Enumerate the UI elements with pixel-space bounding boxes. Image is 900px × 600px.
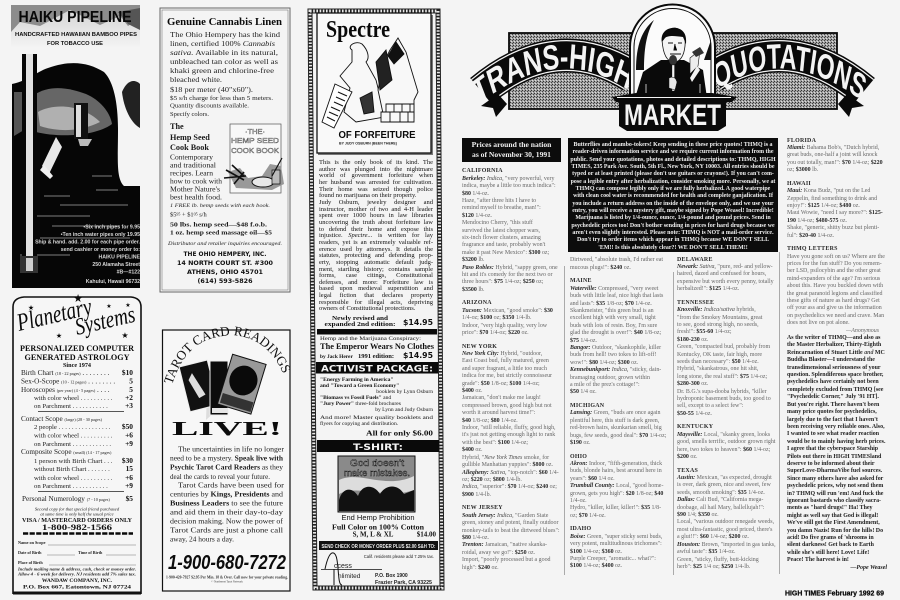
price list: on Parchment . . . . . . . . . . .	[34, 403, 108, 410]
speaker suit	[635, 60, 707, 98]
text block: Spectre book description: spent over 1000 hours in law libraries	[319, 212, 433, 219]
text block: Spectre book description: erence used by attorneys. It details the	[319, 246, 433, 253]
text block: Spectre book description: uncovering the truth about forfeiture law	[319, 219, 433, 226]
column 2: price listings: Boise: Green, "super sticky semi buds, very potent, multitudinous trichomes": $100 1/4-oz; $360 oz. Purple Creeper, "aromatic... what?": $100 1/4-oz; $400 oz.	[570, 534, 662, 569]
column 3: price listings: Maysville: Local, "skanky green, looks good, smells terrific, outdoor grown right here, two tokes to heaven": $60 1/4-oz; $200 oz.	[677, 432, 775, 460]
activist package copy	[320, 377, 434, 438]
linen copy	[170, 30, 280, 118]
text block: Spectre book description	[319, 159, 433, 312]
body copy: away, 24 hours a day.	[170, 536, 234, 544]
ad price and address text: #B—#122	[117, 270, 140, 276]
column 4: prices and letters: Miami: Bahama Bob's, "Dutch hybrid, great buds, one-half a joint will knock you out totally, man!": $70 1/4-oz; $220 oz; $3000 lb.	[787, 145, 883, 173]
activist package copy: "Biomass vs Fossil Fuels" and	[320, 395, 391, 401]
column 4: prices and letters: FLORIDA	[787, 138, 816, 144]
illustration: t-shirt design: make mistakes.	[344, 468, 410, 479]
phone number: 1-900-680-7272	[168, 552, 286, 574]
illustration: t-shirt design: God doesn't	[350, 458, 404, 469]
text block: Spectre book description: statutes, protecting and defending prop-	[319, 252, 433, 259]
activist package copy: and "Toward a Green Economy"	[320, 383, 399, 389]
cook book copy: Contemporary	[170, 154, 213, 162]
text block: Spectre book description: world of government forfeiture when	[319, 172, 433, 179]
order form: Time of Birth	[78, 550, 103, 555]
body copy	[170, 446, 285, 544]
script logo: ★	[106, 303, 112, 310]
column 3: price listings: TENNESSEE	[677, 300, 714, 306]
Access Unlimited logo and address: nlimited	[338, 573, 361, 580]
illustration: Hemp Seed Cook Book: HEMP SEED	[231, 136, 280, 145]
script logo: ★	[121, 331, 129, 340]
cook book copy: 1 oz. hemp seed massage oil—$5	[170, 230, 272, 236]
Access Unlimited logo and address: P.O. Box 1900	[375, 573, 408, 579]
ad heading band: HANDCRAFTED HAWAIIAN BAMBOO PIPES	[15, 32, 137, 38]
column 3: price listings: TEXAS	[677, 468, 698, 474]
cook book copy: best health food.	[170, 194, 222, 202]
script logo	[14, 293, 138, 341]
column 2: price listings: OHIO	[570, 454, 587, 460]
t-shirt bar: T-SHIRT:	[353, 443, 403, 453]
script logo: ★	[56, 332, 62, 340]
script logo: Systems	[73, 302, 138, 341]
activist package copy: And more! Master quality booklets and	[320, 415, 433, 421]
price list: 1 person with Birth Chart . . .	[34, 458, 113, 465]
column 2: price listings: Dirtweed, "absolute trash, I'd rather eat mucous plugs!": $240 oz.	[570, 257, 663, 271]
Access Unlimited logo and address: Frazier Park, CA 93225	[375, 580, 432, 586]
text block: Spectre book description: to defend their home and expose this	[319, 226, 433, 233]
price list: Birth Chart (18 - 22 pages) . . . . . . . .	[21, 369, 110, 377]
linen copy: linen, certified 100% Cannabis	[170, 39, 275, 48]
cook book copy: 05	[194, 212, 198, 216]
column 1: price listings	[462, 168, 560, 571]
column 4: prices and letters: —Anonymous	[846, 328, 879, 334]
company address	[177, 251, 273, 285]
ad: Tarot Card Readings	[162, 326, 291, 592]
prices: +3	[125, 401, 133, 410]
order bar	[319, 541, 438, 550]
linen copy: khaki green and chlorine-free	[170, 66, 275, 75]
price list: without Birth Chart . . . . . . .	[34, 466, 110, 473]
ad heading: Genuine Cannabis Linen	[167, 17, 282, 28]
pedestal and MARKET sign	[612, 93, 737, 132]
price list: Contact Scope (large) (28 - 30 pages)	[21, 415, 102, 423]
column 2: price listings: MAINE	[570, 278, 592, 284]
Emperor book: by Jack Herer	[320, 354, 353, 360]
t-shirt price: Full Color on 100% Cotton	[332, 524, 424, 532]
ad: Genuine Cannabis Linen	[160, 8, 290, 292]
ad price and address text: HAIKU PIPELINE	[98, 254, 141, 260]
illustration: Hemp Seed Cook Book: ·THE·	[245, 127, 265, 136]
prices: $30	[122, 456, 133, 465]
fine print	[166, 576, 288, 584]
prices: +6	[125, 473, 133, 482]
body copy: deal the cards to reveal your future.	[170, 473, 270, 481]
book price: Newly revised and	[332, 316, 389, 322]
illustration: t-shirt design	[338, 456, 415, 522]
activist package copy: flyers for copying and distribution.	[320, 420, 399, 427]
linen copy: Specify colors.	[170, 111, 210, 118]
text block: Spectre book description: ment, startling history; contains sample	[319, 266, 433, 272]
book price	[324, 316, 433, 328]
text block: Spectre book description: forms, case citings, Constitutional	[319, 272, 433, 279]
company address: P.O. Box 667, Eatontown, NJ 07724	[23, 584, 131, 590]
price list: with color wheel . . . . . . . . . .	[34, 475, 113, 482]
ad border	[162, 330, 290, 591]
column 2: price listings: Waterville: Compressed, "very sweet buds with little leaf, nice high that lasts and lasts": $35 1/8-oz; $70 1/4-oz. Skankmeister, "this green bud is an excellent high with very small, tight buds with lots of resin. Boy, I'm sure glad the drought is over!": $40 1/8-oz; $75 1/4-oz. Bangor: Outdoor, "skankophile, killer buds from hell! two tokes to lift-off! wow!": $80 1/4-oz; $300 oz. Kennebunkport: Indica, "sticky, dain- bramaging outdoor, grown within a mile of the prez's cottage!": $50 1/4 oz.	[570, 286, 663, 395]
text block: Spectre book description: readers, yet is an extremely valuable ref-	[319, 239, 433, 246]
order details	[22, 506, 133, 532]
right ribbon: QUOTATIONS	[716, 44, 866, 98]
order details: 1-800-982-1566	[42, 522, 113, 532]
t-shirt bar	[317, 440, 439, 453]
price list: Composite Scope (small) (14 - 17 pages)	[21, 448, 112, 456]
linen copy: sativa. Available in its natural,	[170, 48, 278, 57]
panel: prices header: Prices around the nation as of November 30, 1991	[472, 140, 551, 159]
column 1: price listings: CALIFORNIA	[462, 168, 503, 174]
cook book copy: and traditional	[170, 162, 216, 170]
ad heading: GENERATED ASTROLOGY	[24, 353, 130, 362]
prices: 15	[126, 464, 133, 473]
price list: Personal Numerology (7 - 10 pages)	[22, 495, 110, 503]
Access Unlimited logo and address: ccess	[334, 563, 352, 570]
t-shirt price	[332, 524, 436, 538]
column 4: prices and letters: Maui: Kona Budz, "put on the Led Zeppelin, find something to drink and enjoy!": $125 1/4-oz; $480 oz. Maui Wowie, "need I say more?": $125- 190 1/4-oz; $480-575 oz. Shake, "generic, shitty buzz but plenti- ful": $20-40 1/4-oz.	[787, 188, 883, 239]
book price: expanded 2nd edition:	[324, 322, 396, 328]
prices: 5	[129, 385, 133, 394]
column 2: price listings	[570, 256, 666, 569]
cook book copy: Hemp Seed	[170, 133, 210, 142]
price list: with color wheel . . . . . . . . . .	[34, 395, 113, 402]
cook book copy: Mother Nature's	[170, 186, 220, 194]
company address: (614) 593-5826	[198, 278, 252, 285]
text block: Spectre book description: owners of Constitutional protections.	[319, 305, 415, 312]
company address: 14 NORTH COURT ST. #300	[177, 260, 273, 267]
column 1: price listings: ARIZONA	[462, 300, 492, 306]
linen copy: unbleached tan color as well as	[170, 57, 278, 66]
Emperor book: 1991 edition:	[358, 353, 394, 360]
t-shirt price: S, M, L & XL	[353, 530, 394, 538]
prices: $10	[122, 368, 133, 377]
body copy: The uncertainties in life no longer	[178, 446, 285, 454]
column 1: price listings: NEW JERSEY	[462, 505, 503, 511]
order details: Second copy for that special friend purchased	[35, 506, 120, 512]
cover subtitle: OF FORFEITURE	[338, 130, 416, 141]
speaker head	[662, 28, 685, 62]
price list: on Parchment . . . . . . . . . . . .	[34, 441, 111, 448]
microphone	[669, 55, 677, 65]
cook book copy: + $1	[180, 212, 194, 218]
activist package copy: "Jury Power" three-fold brochures	[320, 400, 401, 407]
linen copy: $5 s/h charge for less than 5 meters.	[170, 95, 274, 102]
body copy: Psychic Tarot Card Readers as they	[170, 464, 283, 472]
price list: Horoscopes (per year) (4 - 5 pages) . . . .	[21, 386, 110, 394]
panel: prices header	[462, 138, 561, 162]
order details: at same time is only half the usual price	[40, 512, 114, 516]
ad heading band: HAIKU PIPELINE	[18, 9, 132, 26]
column 4: prices and letters: —Pope Weasel	[850, 565, 887, 571]
prices: $5	[126, 494, 133, 503]
illustration: Hemp Seed Cook Book: COOK BOOK	[231, 146, 279, 155]
text block: Spectre book description: defenses, and more: Forfeiture law is	[319, 279, 433, 286]
cook book copy: how to cook with	[170, 178, 222, 186]
linen copy: $18 per meter (40"x60").	[170, 85, 253, 94]
ad: Haiku Pipeline	[11, 5, 141, 288]
order form: Allow 4 - 6 week for delivery. NJ residents add 7% sales tax.	[17, 572, 136, 576]
price list	[21, 369, 115, 503]
text block: Spectre book description: erty, stopping automatic default judg-	[319, 259, 433, 266]
activist package bar	[316, 362, 438, 374]
ad price and address text: Ship & hand. add. 2.00 for each pipe order.	[35, 240, 141, 246]
panel: reader instructions: Butterflies and mambo-tokers! Keep sending in these price quotes! THMQ is a reader-driven information service and we require current information from the public. Send your quotations, photos and detailed descriptions to: THMQ, HIGH TIMES, 235 Park Ave. South, 5th Fl., New York, NY 10003. All entries should be typed or at least printed (please don't use guitars or crayons!). If you can't com- pose a legible entry after herbalization, consider smoking more. Personally, we at THMQ can compose legibly only if we are fully herbalized. A good waterpipe with clean cool water is recommended for health and complete ganjafication. If you include a return address on the inside of the envelope only, and we use your entry, you will receive a mystery gift, maybe signed by Pope Weasel! Incredible! Marijuana is listed by 1/4-ounce, ounce, 1/4-pound and pound prices. Send in psychedelic prices too! Don't bother sending in prices for hard drugs because we aren't even slightly interested. Please note: THMQ is NOT a mail-order service. Don't try to order items which appear in THMQ because WE DON'T SELL 'EM!! Is this absolutely clear?! WE DON'T SELL THEM!!	[570, 142, 776, 251]
prices: $50	[122, 422, 133, 431]
Access Unlimited logo and address: Calif. residents please add 7.25% tax.	[364, 554, 434, 559]
body copy: need to be a mystery. Speak live with	[170, 454, 283, 462]
linen copy: bleached white.	[170, 75, 222, 84]
ad: Spectre of Forfeiture	[310, 11, 442, 588]
text block: Spectre book description: Judy Osburn, jewelry designer and	[319, 199, 433, 206]
Emperor book: $14.95	[403, 351, 433, 360]
body copy: Business Leaders to see the future	[170, 500, 283, 508]
script logo: ★	[28, 304, 34, 312]
prices: 5	[129, 376, 133, 386]
cook book copy: 1 FREE lb. hemp seeds with each book.	[170, 203, 270, 209]
left ribbon: TRANS-HIGH	[472, 44, 629, 98]
text block: Spectre book description: injustice. Spectre... is written for lay	[319, 232, 433, 239]
blackletter title: Spectre	[326, 17, 390, 43]
fine print: 1-900-420-7927 $2.95 Per Min. 18 & Over. Call now for your private reading.	[166, 576, 288, 580]
column 3: price listings: Newark: Sativa, "pure, red- and yellow- haired, dazed and confused for hours, expensive but worth every penny, totally herbalized!": $125 1/4-oz.	[677, 264, 774, 292]
ad heading: Since 1974	[63, 362, 91, 369]
text block: Spectre book description: her husband was arrested for cultivation.	[319, 179, 433, 186]
company address	[23, 578, 131, 590]
cook book copy: 95	[176, 212, 180, 216]
linen copy: Quantity discounts available.	[170, 104, 250, 110]
body copy: Tarot Cards are just a phone call	[170, 526, 283, 534]
column 3: price listings: KENTUCKY	[677, 424, 713, 430]
price list: Sex-O-Scope (10 - 12 pages) . . . . . . . .	[21, 378, 115, 386]
Emperor book: Hemp and the Marijuana Conspiracy:	[320, 336, 422, 342]
column 3: price listings	[676, 256, 776, 570]
order form: Place of Birth	[18, 560, 43, 565]
column 1: price listings: New York City: Hybrid, "outdoor, East Coast bud, fully matured, green and super fragrant, a little too much indica for me, but strictly connoisseur grade": $50 1/8-oz; $100 1/4-oz; $400 oz. Jamaican, "don't make me laugh! compressed brown, good high but not worth it around harvest time!": $40 1/8-oz; $80 1/4-oz. Indoor, "still reliable, fluffy, good high, it's just not getting enough light to rank with the best": $100 1/4-oz; $400 oz. Hybrid, "New York Times smoke, for gullible Manhattan yuppies": $800 oz. Allegheny: Sativa, "top-notch": $60 1/4- oz; $220 oz; $800 1/4-lb. Indica, "superior": $70 1/4-oz; $240 oz; $900 1/4-lb.	[462, 351, 559, 498]
arch with speaker	[630, 5, 715, 100]
order form: Include mailing name & address, cash, check or money order.	[17, 566, 136, 572]
company address: ATHENS, OHIO 45701	[187, 269, 263, 276]
Emperor book	[320, 336, 434, 360]
ad heading band	[11, 5, 140, 48]
text block: Spectre book description: found no marijuana on their property.	[319, 192, 416, 199]
illustration: Hemp Seed Cook Book	[224, 124, 284, 193]
column 2: price listings: Lansing: Green, "buds are once again plentiful here, this stuff is dark green, red-brown hairs, skunkarian smell, big bugs, few seeds, good deal": $70 1/4-oz; $190 oz.	[570, 410, 666, 446]
body copy: centuries by Kings, Presidents and	[170, 490, 283, 498]
order bar: SEND CHECK OR MONEY ORDER PLUS $2.00 S&H TO:	[322, 544, 436, 550]
column 1: price listings: NEW YORK	[462, 344, 497, 350]
script logo: ★	[73, 293, 83, 305]
fine print: © Northwest Tarot Network	[211, 580, 243, 584]
ad price and address text: Kahului, Hawaii 96732	[86, 279, 140, 285]
prices: +9	[125, 439, 133, 448]
ad price and address text	[35, 224, 141, 285]
prices	[122, 368, 133, 503]
column 1: price listings: South Jersey: Indica, "Garden State green, stoney and potent, finally outdoor monkey-tails to beat the dirtweed blues": $80 1/4-oz. Trenton: Jamaican, "native skanka- roidal, away we go!": $250 oz. Import, "poorly processed but a good high": $240 oz.	[462, 513, 560, 571]
text block: Spectre book description: This is the only book of its kind. The	[319, 159, 433, 166]
cook book copy	[167, 122, 282, 247]
arched heading: TAROT CARD READINGS	[164, 326, 290, 383]
linen copy: The Ohio Hempery has the kind	[170, 30, 280, 39]
column 4: prices and letters	[786, 138, 887, 571]
cook book copy: s/h	[198, 212, 207, 218]
footer: folio: HIGH TIMES February 1992 69	[785, 588, 884, 598]
book price: $14.95	[403, 318, 433, 327]
banner: Trans-High Market Quotations	[470, 4, 875, 132]
text block: Spectre book description: author was plunged into the nightmare	[319, 166, 433, 173]
text block: Spectre book description: instructor, mother of two and 4-H leader	[319, 206, 433, 213]
t-shirt price: $14.00	[417, 530, 436, 538]
column 1: price listings: Berkeley: Indica, "very powerful, very indica, maybe a little too much indica": $80 1/4-oz. Haze, "after three hits I have to remind myself to breathe, man!": $120 1/4-oz. Mendocino Cherry, "this stuff survived the latest chopper wars, six-inch flower clusters, amazing fragrance and taste, probably won't make it past New Mexico": $300 oz; $3200 lb. Paso Robles: Hybrid, "sappy green, one hit and it's comedy for the next two or three hours": $75 1/4-oz; $250 oz; $3500 lb.	[462, 176, 558, 293]
price list: on Parchment . . . . . . . . . . .	[34, 483, 108, 490]
text block: Spectre book description: based upon medieval superstition and	[319, 285, 433, 292]
rope border	[310, 11, 442, 588]
ad heading band: FOR TOBACCO USE	[47, 41, 103, 47]
column 3: price listings: Knoxville: Indica/sativa hybrids, "from the Smokey Mountains, great to see, good strong high, no seeds, fresh!": $55-60 1/4-oz; $180-230 oz. Green, "compacted bud, probably from Kentucky, OK taste, fair high, more seeds than necessary": $50 1/4-oz. Hybrid, "skankatrous, one hit shit, long stone, the real stuff": $75 1/4-oz; $280-300 oz. Dr. B.G.'s supa-dooba hybrids, "killer hydroponic basement buds, too good to sell, except to a select few": $50-55 1/4-oz.	[677, 307, 771, 417]
column 4: prices and letters: Have you gone soft on us? Where are the prices for the fun stuff? Do you remem- ber LSD, psilocybin and the other great mind-expanders of the age? I'm serious about this. Have you buckled down with the great paranoid legions and classified these gifts of nature as hard drugs? Get off your ass and give us the information on psychedelics we need and crave. Man does not live on pot alone.	[787, 254, 885, 326]
activist package bar: ACTIVIST PACKAGE:	[321, 364, 433, 374]
ad price and address text: •Ten inch water pipes only 19.95	[61, 232, 140, 238]
body copy: decision making. Now the power of	[170, 518, 284, 526]
order form: Name on Scope	[18, 540, 46, 545]
order details: VISA / MASTERCARD ORDERS ONLY	[22, 518, 133, 524]
cook book copy: 50 lbs. hemp seed—$48 f.o.b.	[170, 222, 267, 228]
Access Unlimited logo and address	[321, 553, 434, 586]
order form	[17, 540, 136, 576]
script logo: ★	[125, 302, 131, 309]
illustration: wave and bamboo pipes	[12, 54, 140, 288]
column 4: prices and letters: THMQ LETTERS	[787, 246, 838, 252]
LIVE! headline: LIVE!	[172, 418, 282, 440]
script logo: Planetary	[14, 293, 95, 337]
cook book copy: The	[170, 122, 184, 131]
Emperor book: The Emperor Wears No Clothes	[320, 342, 434, 351]
price list: with color wheel . . . . . . . . . .	[34, 432, 113, 440]
illustration: t-shirt design: End Hemp Prohibition	[342, 513, 414, 522]
ad: Planetary Systems	[13, 293, 141, 594]
column 1: price listings: Tucson: Mexican, "good smoke": $30 1/4-oz; $100 oz; $350 1/4-lb. Indoor, "very high quality, very low price": $70 1/4-oz; $220 oz.	[462, 308, 553, 336]
pedestal and MARKET sign: MARKET	[624, 99, 721, 132]
cook book copy: Cook Book	[170, 143, 209, 152]
ad heading	[20, 344, 135, 369]
ad price and address text: send cashier or money order to:	[61, 247, 140, 253]
activist package copy: by Lynn and Judy Osburn	[375, 407, 433, 413]
body copy: and aid them in their day-to-day	[170, 508, 283, 516]
activist package copy: "Energy Farming in America"	[320, 377, 393, 383]
company address: THE OHIO HEMPERY, INC.	[184, 251, 266, 258]
activist package copy: booklets by Lynn Osburn	[376, 389, 433, 395]
prices: +2	[125, 393, 133, 402]
book cover	[317, 13, 433, 155]
body copy: Tarot Cards have been used for	[178, 482, 285, 490]
ad price and address text: •Six inch pipes for 9.95	[83, 224, 140, 230]
text block: Spectre book description: legal fiction that declares property	[319, 292, 433, 299]
ad border	[13, 297, 141, 594]
illustration: figures with scroll	[322, 38, 418, 128]
stippled panels	[509, 33, 837, 109]
column 3: price listings: Austin: Mexican, "as expected, drought is over, dark green, nice and sweet, few seeds, smooth smoking": $35 1/4-oz. Dallas: Cali Bud, "California mega- doobage, all hail Mary, ballellujah!": $90 1/4; $350 oz. Local, "various outdoor renegade weeds, most ultra-fantastic, good priced, there's a glut!!": $60 1/4-oz; $200 oz. Houston: Brown, "imported in gas tanks, awful taste": $35 1/4-oz. Green, "sticky, fluffy, butt-kicking herb": $25 1/4 oz; $250 1/4-lb.	[677, 475, 776, 570]
column 4: prices and letters: As the writer of THMQ—and also as the Master Herbalizer, Thirty-Eighth Reincarnation of Stuart Little and MC Buddha Blaster—I understand the transdimensional seriousness of your question. Splendiferous space brother, psychedelics have certainly not been completely excluded from THMQ [see "Psychedelic Corner," July '91 HT]. But you're right. There haven't been many price quotes for psychedelics, largely due to the fact that I haven't been receiving very reliable ones. Also, I wanted to see what reader reaction would be to mainly having herb prices. I agree that the cyberspace Starship Pilots out there in HIGH TIMESland deserve to be informed about their SuperLove-DharmaVibe fuel sources. Since many others have also asked for psychedelic prices, why not send them in? THMQ will run 'em! And fuck the ignorant bastards who classify sacra- ments as "hard drugs!" Ha! They might as well say that God is illegal! We've still got the First Amendment, you damn Nazis! Run for the hills! Do acid! Do five grams of 'shrooms in silent darkness! Get back to Earth while she's still here! Love! Life! Peace! The harvest is in!	[787, 335, 885, 563]
double border	[160, 8, 290, 292]
prices: +6	[125, 430, 133, 440]
cook book copy: recipes. Learn	[170, 170, 213, 178]
column 2: price listings: MICHIGAN	[570, 403, 604, 409]
column 4: prices and letters: HAWAII	[787, 181, 811, 187]
ad heading: PERSONALIZED COMPUTER	[20, 344, 135, 353]
column 2: price listings: IDAHO	[570, 526, 591, 532]
text block: Spectre book description: Their home was seized though police	[319, 186, 433, 193]
activist package copy: All for only $6.00	[366, 430, 434, 438]
price list: 2 people . . . . . . . . . . . . . . . .	[34, 424, 111, 431]
book cover: BY JUDY OSBURN (BEEN THERE)	[339, 142, 398, 146]
illustration: tarot cards	[179, 354, 266, 420]
order form: Date of Birth	[18, 550, 42, 555]
company address: WANDAW COMPANY, INC.	[42, 578, 113, 584]
text block: Spectre book description: responsible for illegal acts, depriving	[319, 299, 433, 306]
prices: +9	[125, 481, 133, 490]
column 3: price listings: DELAWARE	[677, 256, 713, 262]
ad price and address text: 250 Alamaha Street	[92, 262, 140, 268]
cook book copy: Distributor and retailer inquiries encouraged.	[167, 241, 282, 247]
cook book copy: $5	[170, 212, 176, 218]
column 2: price listings: Akron: Indoor, "fifth-generation, thick buds, blonde hairs, best around here in years": $60 1/4 oz. Trumbull County: Local, "good home- grown, gets you high": $20 1/8-oz; $40 1/4-oz. Hydro, "killer, killer, killer!": $35 1/8- oz; $70 1/4-oz.	[570, 461, 663, 519]
